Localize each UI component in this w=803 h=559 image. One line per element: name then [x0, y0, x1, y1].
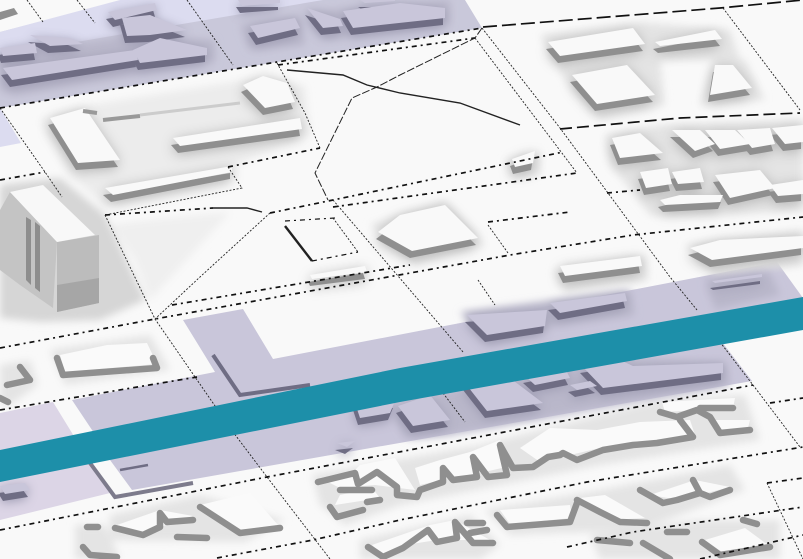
building fragment: top left corner: [0, 8, 18, 20]
zone: left purple district: [0, 402, 110, 520]
small square plot: [285, 218, 358, 261]
wall fragments: left block: [83, 103, 240, 120]
building: tower: [0, 185, 99, 312]
rooftops: lower rows: [60, 343, 768, 555]
wall lines: lower rows: [0, 358, 770, 559]
buildings: central block: [310, 151, 642, 279]
zone: central lavender corridor: [72, 262, 803, 490]
highway: teal band: [0, 297, 803, 482]
buildings: central corridor: [0, 274, 762, 494]
zone: upper lavender district: [0, 0, 482, 147]
wall lines: corridor edges: [90, 355, 310, 497]
buildings: left block: [50, 76, 302, 195]
pathways: black site paths: [213, 28, 520, 212]
buildings: upper right blocks: [548, 28, 803, 260]
corridor halos: [0, 0, 780, 438]
buildings: upper district: [0, 0, 445, 80]
